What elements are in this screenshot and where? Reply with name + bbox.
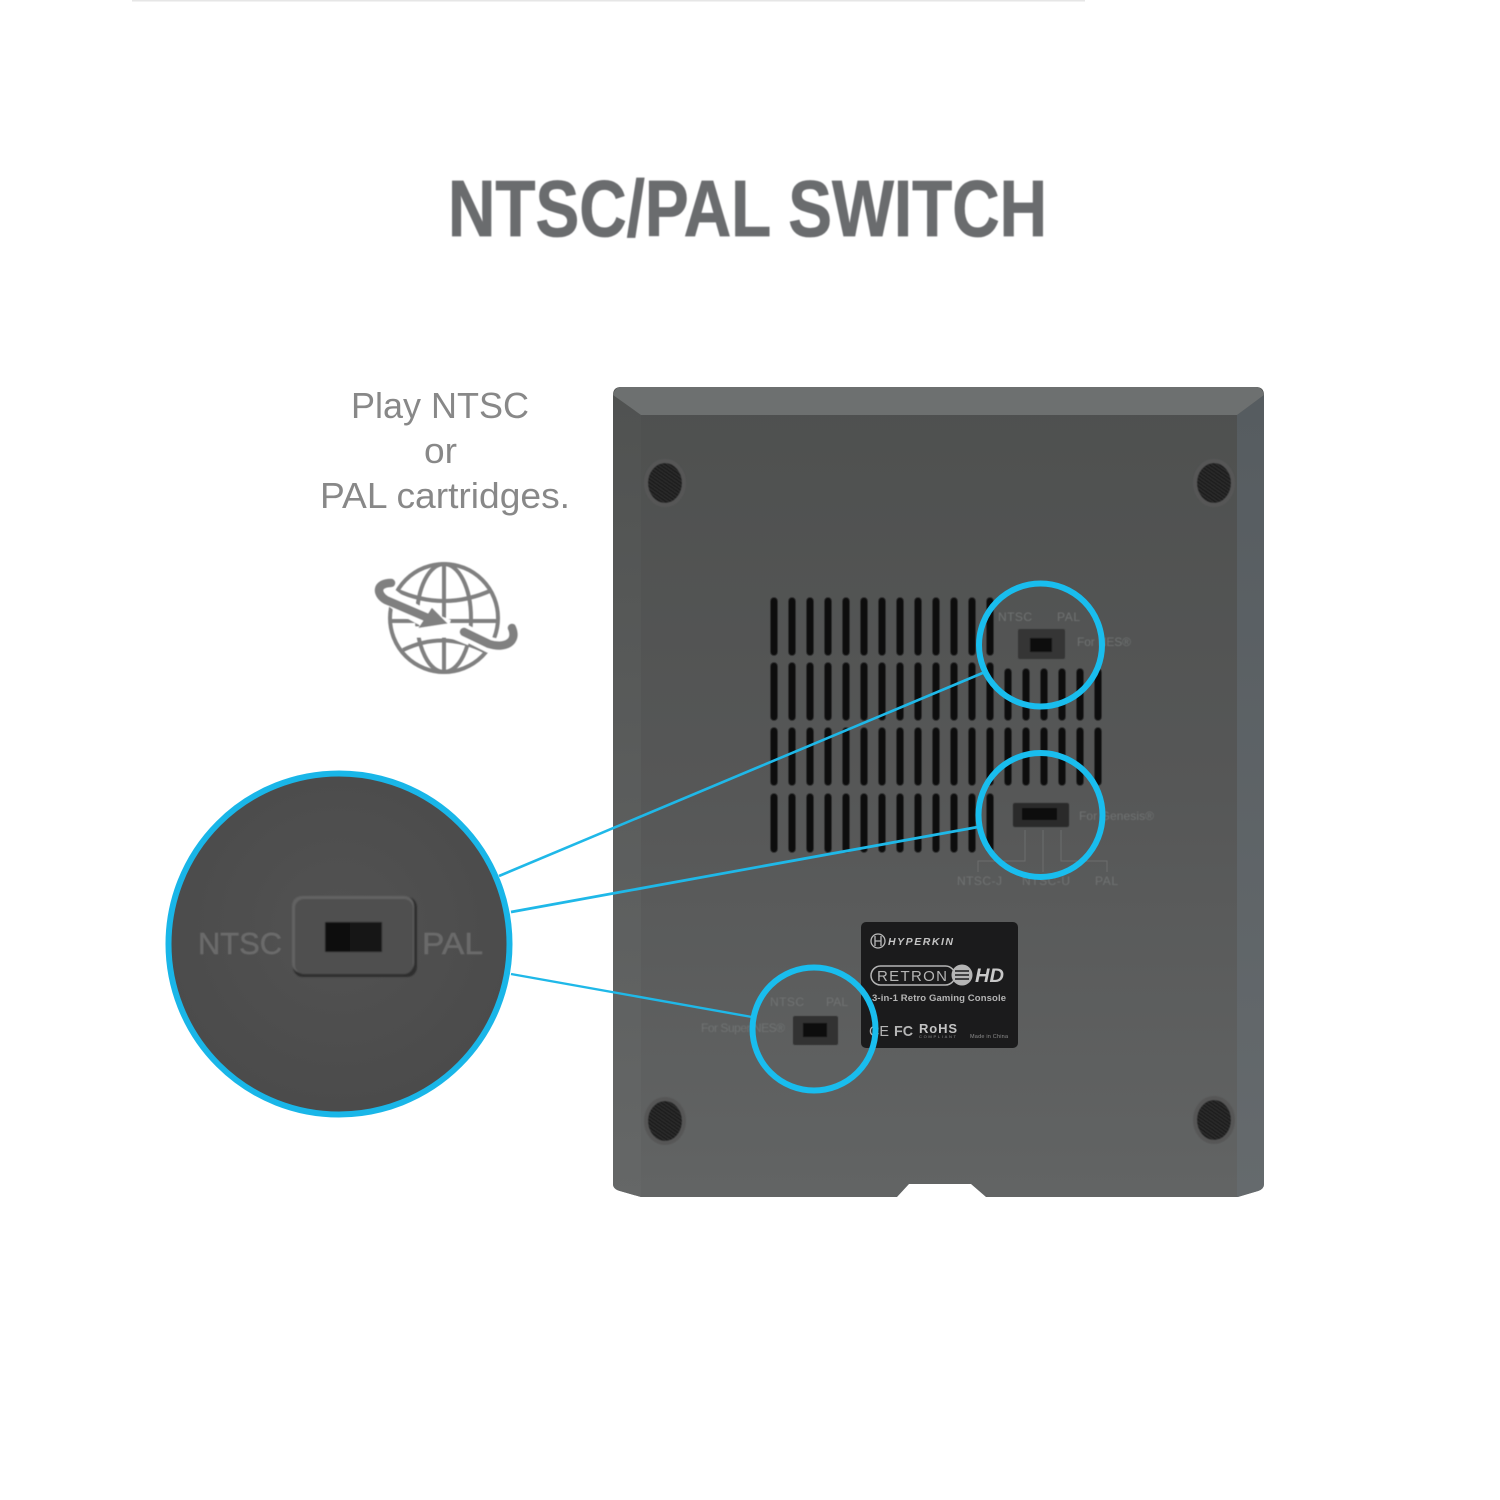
moulded console labels: NTSC bbox=[998, 610, 1032, 624]
magnified switch housing bbox=[292, 896, 417, 977]
magnified NTSC label: NTSC bbox=[198, 926, 282, 961]
console right bevel bbox=[1237, 395, 1264, 1197]
text block: cartridge description bbox=[320, 385, 570, 516]
switch: Super NES bbox=[793, 1016, 838, 1045]
moulded console labels: PAL bbox=[1057, 610, 1080, 624]
moulded console labels: PAL bbox=[826, 995, 848, 1009]
switch: Genesis bbox=[1013, 803, 1069, 827]
product label: HD bbox=[975, 966, 1004, 987]
product label: CE bbox=[869, 1023, 889, 1040]
moulded console labels: For Super NES® bbox=[701, 1021, 785, 1035]
text block: cartridge description: Play NTSC bbox=[351, 385, 529, 426]
console left bevel bbox=[613, 395, 641, 1197]
moulded console labels bbox=[701, 610, 1154, 1035]
moulded console labels: For NES® bbox=[1077, 635, 1131, 649]
panel: magnified switch bbox=[168, 774, 510, 1114]
text block: cartridge description: or bbox=[424, 430, 457, 471]
moulded console labels: NTSC-U bbox=[1022, 874, 1070, 888]
console body bbox=[613, 387, 1264, 1197]
highlight circle: NES switch bbox=[979, 584, 1102, 706]
product label: RETRON bbox=[877, 968, 947, 985]
Retron logo bbox=[871, 966, 955, 985]
magnified PAL label: PAL bbox=[422, 926, 483, 961]
rubber feet bbox=[646, 461, 1233, 1143]
product label: 3-in-1 Retro Gaming Console bbox=[872, 993, 1006, 1004]
moulded console labels: For Genesis® bbox=[1079, 809, 1154, 823]
console top bevel bbox=[613, 387, 1264, 415]
callout lines bbox=[499, 672, 985, 1017]
product label bbox=[861, 922, 1018, 1048]
highlight circle: Super NES switch bbox=[752, 968, 876, 1090]
highlight circle: Genesis switch bbox=[978, 753, 1102, 877]
text block: cartridge description: PAL cartridges. bbox=[320, 475, 570, 516]
product label: Made in China bbox=[970, 1034, 1009, 1040]
region selector brackets bbox=[978, 830, 1107, 872]
moulded console labels: NTSC bbox=[770, 995, 804, 1009]
title: NTSC/PAL SWITCH bbox=[448, 164, 1047, 253]
moulded console labels: PAL bbox=[1095, 874, 1118, 888]
Hyperkin logo bbox=[871, 934, 885, 948]
product label: RoHS bbox=[919, 1021, 957, 1036]
magnifier circle bbox=[168, 774, 510, 1114]
icon: globe with orbit arrows bbox=[379, 564, 514, 672]
moulded console labels: NTSC-J bbox=[957, 874, 1002, 888]
product label: COMPLIANT bbox=[919, 1034, 957, 1039]
panel: console underside bbox=[613, 387, 1264, 1197]
product label: HYPERKIN bbox=[888, 936, 953, 948]
switch: NES bbox=[1018, 629, 1065, 659]
product label: FC bbox=[894, 1023, 913, 1040]
vent slots bbox=[774, 601, 1098, 849]
